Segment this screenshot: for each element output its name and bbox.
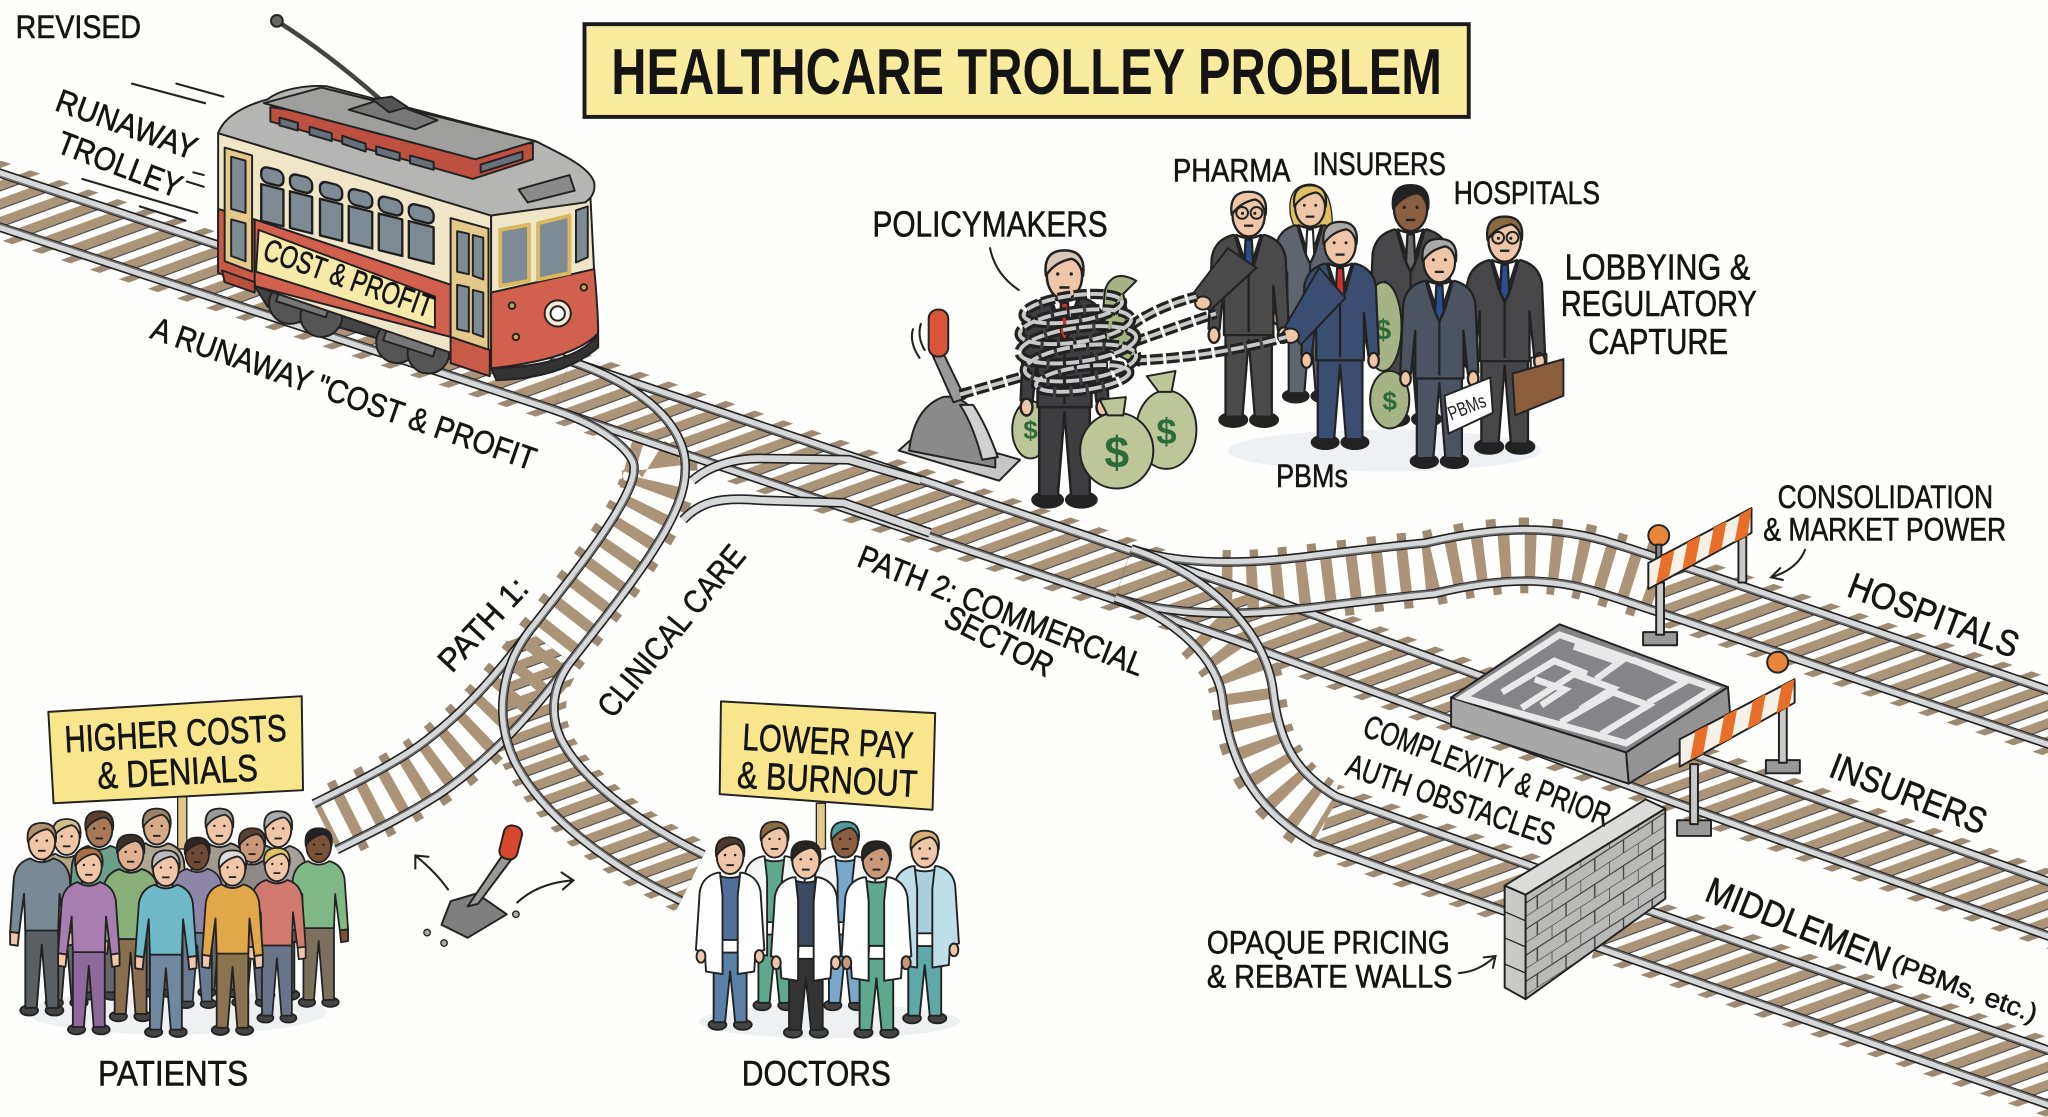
label: opaque pricing and rebate walls <box>1207 923 1452 994</box>
runaway trolley label with speed lines <box>51 82 223 221</box>
label: pbms: PBMs <box>1276 457 1348 494</box>
money bags behind policymaker: $ <box>1156 411 1177 452</box>
track network: main line, clinical branches and commercial branches <box>0 196 2048 1083</box>
lobbyists group <box>1194 184 1563 472</box>
sign: higher costs and denials <box>48 696 303 803</box>
barrier: insurers obstacles <box>1677 652 1800 836</box>
label: insurers track: INSURERS <box>1824 745 1993 842</box>
lower switch lever with arrows <box>415 824 573 946</box>
policymaker in chains <box>1013 250 1287 507</box>
revised tag: REVISED <box>16 8 141 45</box>
upper lever with chain link <box>899 310 1024 481</box>
runaway trolley label with speed lines: RUNAWAY <box>51 82 203 167</box>
blue suit arm holding chain <box>1282 268 1345 345</box>
title banner: HEALTHCARE TROLLEY PROBLEM <box>611 35 1442 108</box>
side money bags: $ <box>1382 386 1397 416</box>
sign: higher costs and denials: & DENIALS <box>96 748 259 798</box>
label: consolidation and market power: CONSOLIDATION <box>1778 478 1993 515</box>
trolley roof <box>218 86 594 216</box>
runaway trolley label with speed lines: TROLLEY <box>52 124 188 205</box>
patients group <box>10 797 348 1037</box>
label: insurers: INSURERS <box>1313 145 1446 182</box>
label: path 1: PATH 1: <box>430 569 535 679</box>
patients sign post <box>178 797 187 849</box>
doctors group <box>696 803 960 1038</box>
sign: lower pay and burnout: LOWER PAY <box>741 717 914 768</box>
sign: higher costs and denials: HIGHER COSTS <box>64 708 288 761</box>
blonde hair <box>1290 184 1332 232</box>
pharma arms holding chain <box>1194 248 1256 311</box>
trolley windows <box>261 166 434 264</box>
trolley <box>218 15 598 380</box>
label: hospitals track: HOSPITALS <box>1843 565 2025 666</box>
pbms card: PBMs <box>1445 390 1489 425</box>
title banner <box>584 24 1469 117</box>
label: doctors: DOCTORS <box>742 1054 891 1093</box>
glasses <box>1236 207 1518 244</box>
chains from lobbyists wrapped around policymaker <box>1013 287 1287 398</box>
cost and profit sign text: COST & PROFIT <box>259 232 438 325</box>
label: lobbying and regulatory capture: CAPTURE <box>1588 321 1728 362</box>
briefcase <box>1512 354 1563 415</box>
money bags behind policymaker: $ <box>1023 415 1038 445</box>
track captions <box>147 309 1150 724</box>
trolley front <box>491 196 598 380</box>
sign: lower pay and burnout <box>720 701 935 810</box>
label: middlemen track: (PBMs, etc.) <box>1888 948 2042 1028</box>
label: opaque pricing and rebate walls: OPAQUE PRICING <box>1207 923 1450 960</box>
side money bags <box>1365 282 1409 428</box>
label: pharma: PHARMA <box>1173 152 1291 189</box>
label: consolidation and market power <box>1763 478 2006 548</box>
label: clinical care: CLINICAL CARE <box>589 537 753 724</box>
label: sector: SECTOR <box>939 598 1060 684</box>
trolley pole <box>271 15 380 99</box>
label: lobbying and regulatory capture: REGULATORY <box>1561 283 1757 324</box>
label: policymakers: POLICYMAKERS <box>872 203 1108 244</box>
label: hospitals: HOSPITALS <box>1454 174 1600 211</box>
label: lobbying and regulatory capture: LOBBYING & <box>1565 247 1750 288</box>
label: complexity and prior auth obstacles: AUTH OBSTACLES <box>1342 746 1560 853</box>
label: patients: PATIENTS <box>98 1054 248 1093</box>
side money bags: $ <box>1375 315 1391 347</box>
arrow: rebate walls pointer <box>1459 956 1496 973</box>
money bags behind policymaker <box>1012 276 1196 469</box>
label: opaque pricing and rebate walls: & REBATE WALLS <box>1207 957 1452 994</box>
front money bag <box>1080 397 1153 488</box>
label: lobbying and regulatory capture <box>1561 247 1757 362</box>
front money bag: $ <box>1104 429 1129 478</box>
barrier: hospitals consolidation <box>1643 508 1752 645</box>
label: path 2 commercial: PATH 2: COMMERCIAL <box>853 538 1150 683</box>
label: complexity and prior auth obstacles <box>1342 707 1616 853</box>
label: runaway cost and profit: A RUNAWAY "COST & PROFIT <box>147 309 541 477</box>
doctors sign post <box>816 803 825 849</box>
label: complexity and prior auth obstacles: COMPLEXITY & PRIOR <box>1359 707 1616 833</box>
sign: lower pay and burnout: & BURNOUT <box>736 755 918 806</box>
label: middlemen track <box>1700 869 2042 1028</box>
trolley side body <box>218 133 491 376</box>
pointer: policymaker <box>990 248 1019 290</box>
policymakers and industry labels <box>872 145 1757 494</box>
brick wall obstacle <box>1505 799 1665 999</box>
obstacle and track labels <box>1207 478 2042 1028</box>
label: middlemen track: MIDDLEMEN <box>1700 869 1896 979</box>
pbms card <box>1445 377 1493 434</box>
undercarriage and wheels <box>255 282 451 374</box>
arrow: consolidation pointer <box>1771 550 1805 580</box>
maze obstacle <box>1451 624 1731 784</box>
